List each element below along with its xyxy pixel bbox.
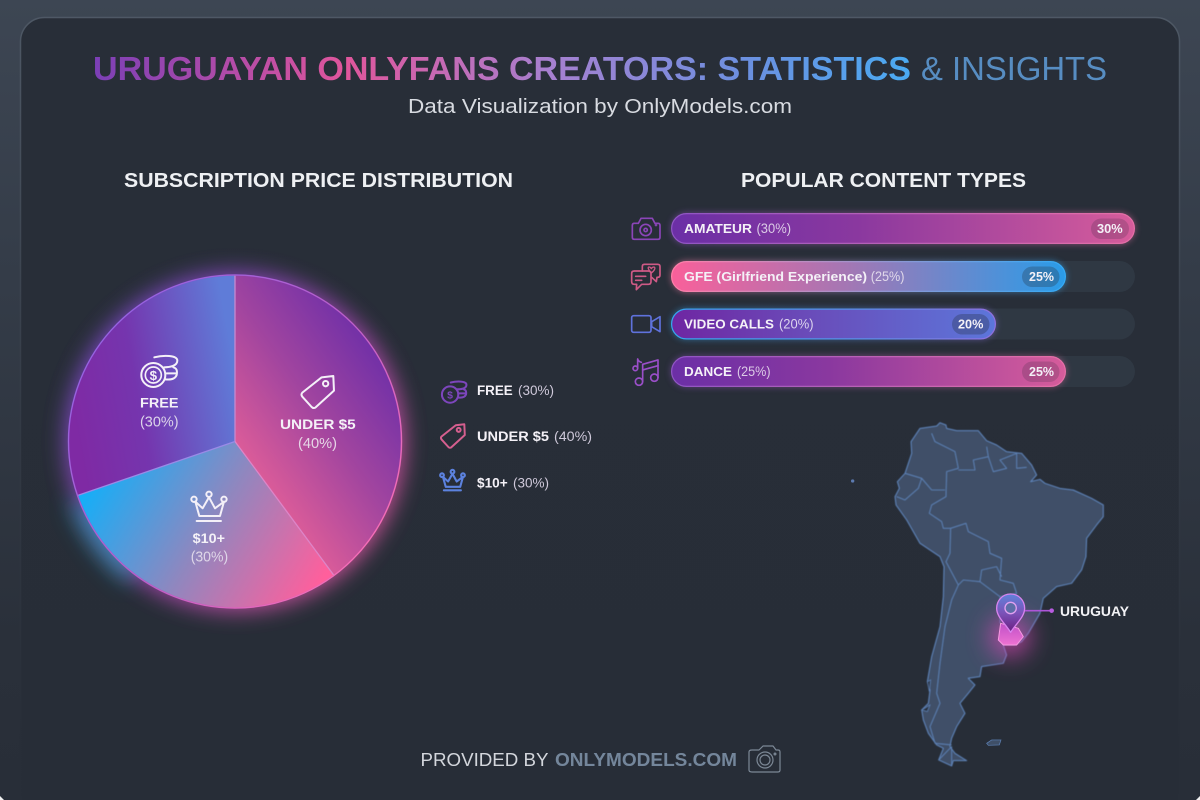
bar: video calls: VIDEO CALLS bbox=[684, 316, 774, 332]
label: $10+: $10+ bbox=[193, 530, 225, 546]
map: south america bbox=[851, 423, 1103, 766]
legend item: under $5: UNDER $5 bbox=[477, 429, 550, 444]
bar: gfe: (25%) bbox=[871, 269, 904, 284]
bar: video calls bbox=[632, 308, 1135, 340]
legend item: $10+: (30%) bbox=[513, 474, 549, 490]
region: uruguay bbox=[998, 623, 1023, 645]
legend item: $10+ bbox=[440, 470, 549, 490]
slice: $10+ bbox=[78, 442, 334, 608]
glow: uruguay bbox=[989, 616, 1031, 657]
label: $10+ bbox=[191, 530, 228, 566]
legend item: free bbox=[442, 382, 554, 403]
subtitle: Data Visualization by OnlyModels.com bbox=[408, 96, 792, 118]
icon: camera bbox=[632, 218, 660, 239]
heading: popular content types: POPULAR CONTENT TYPES bbox=[741, 170, 1026, 192]
bar: amateur: AMATEUR bbox=[684, 221, 753, 236]
bar: dance bbox=[633, 356, 1135, 387]
label: uruguay: URUGUAY bbox=[1060, 603, 1130, 619]
icon: footer camera bbox=[749, 746, 780, 772]
icon: video camera bbox=[632, 316, 660, 332]
legend item: free: $ bbox=[447, 390, 453, 401]
icon: coins on pie bbox=[141, 356, 177, 387]
label: under $5 bbox=[280, 416, 356, 452]
icon: price tag on pie bbox=[301, 376, 334, 408]
legend item: free: (30%) bbox=[518, 382, 554, 398]
icon: chat bubbles bbox=[632, 264, 660, 290]
legend item: under $5 bbox=[441, 424, 592, 448]
legend bbox=[440, 382, 592, 490]
pie chart bbox=[65, 272, 405, 612]
slice: under $5 bbox=[235, 275, 402, 576]
label: under $5: UNDER $5 bbox=[280, 416, 356, 432]
bar: video calls: 20% bbox=[958, 318, 983, 332]
bar: dance: DANCE bbox=[684, 364, 732, 379]
legend item: $10+: $10+ bbox=[477, 476, 508, 490]
bar: dance: 25% bbox=[1029, 365, 1054, 379]
label: free bbox=[140, 395, 179, 431]
footer: ONLYMODELS.COM bbox=[555, 750, 737, 770]
icon: coins on pie: $ bbox=[150, 368, 158, 383]
slice: free bbox=[69, 275, 235, 496]
label: $10+: (30%) bbox=[191, 549, 228, 566]
label: free: FREE bbox=[140, 395, 178, 411]
bar: gfe: GFE (Girlfriend Experience) bbox=[684, 269, 867, 284]
bar: dance: (25%) bbox=[737, 364, 770, 379]
footer bbox=[420, 746, 780, 772]
islands bbox=[987, 740, 1001, 745]
legend item: under $5: (40%) bbox=[554, 428, 592, 444]
bar: amateur: 30% bbox=[1097, 222, 1123, 236]
title: & INSIGHTS bbox=[921, 50, 1107, 87]
bar: video calls: (20%) bbox=[779, 316, 814, 332]
bar chart: popular content types bbox=[632, 213, 1135, 387]
title: URUGUAYAN ONLYFANS CREATORS: STATISTICS bbox=[93, 50, 911, 87]
connector line bbox=[1025, 608, 1054, 613]
label: under $5: (40%) bbox=[298, 435, 337, 452]
label: free: (30%) bbox=[140, 414, 179, 431]
icon: music notes bbox=[633, 359, 658, 385]
icon: location pin bbox=[997, 594, 1025, 632]
icon: crown on pie bbox=[191, 492, 227, 521]
legend item: free: FREE bbox=[477, 383, 513, 398]
bar: amateur: (30%) bbox=[756, 221, 791, 236]
bar: amateur bbox=[632, 213, 1135, 244]
bar: gfe bbox=[632, 261, 1135, 292]
heading: subscription price distribution: SUBSCRIPTION PRICE DISTRIBUTION bbox=[124, 170, 513, 192]
footer: PROVIDED BY bbox=[420, 750, 548, 770]
bar: gfe: 25% bbox=[1029, 270, 1054, 284]
